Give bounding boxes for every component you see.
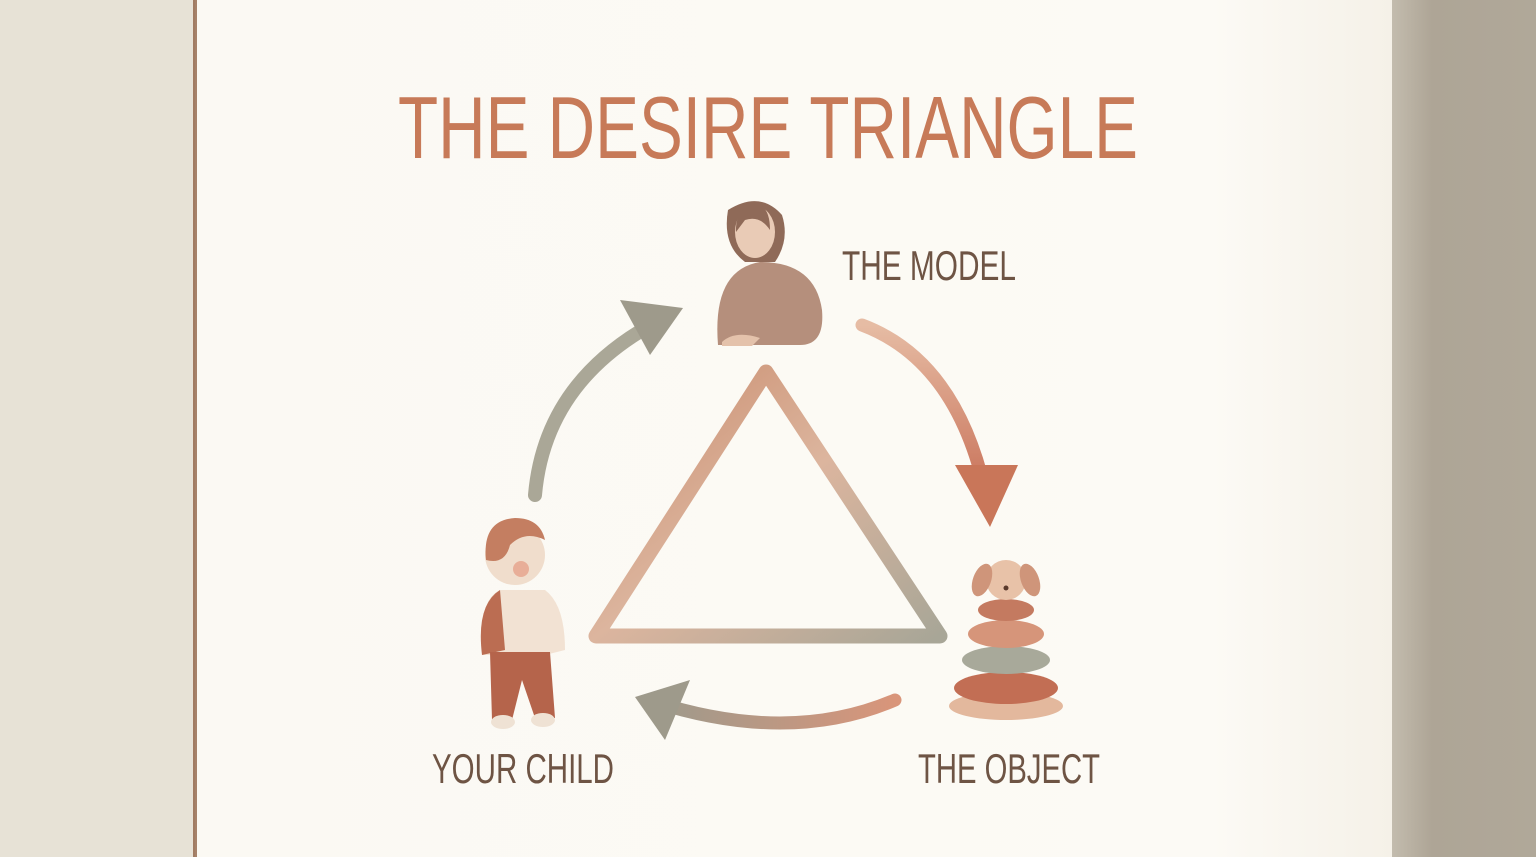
icon: the object (stacking toy)	[949, 560, 1063, 720]
arrow: child to model	[535, 300, 683, 495]
label: the object: THE OBJECT	[918, 745, 1100, 792]
icon: the model (woman)	[717, 201, 822, 346]
label: your child: YOUR CHILD	[432, 745, 614, 792]
arrow: model to object	[862, 325, 1018, 527]
title: THE DESIRE TRIANGLE	[398, 78, 1138, 177]
arrow: object to child	[635, 680, 895, 740]
icon: your child	[481, 518, 565, 729]
label: the model: THE MODEL	[842, 242, 1016, 289]
triangle	[596, 372, 940, 636]
